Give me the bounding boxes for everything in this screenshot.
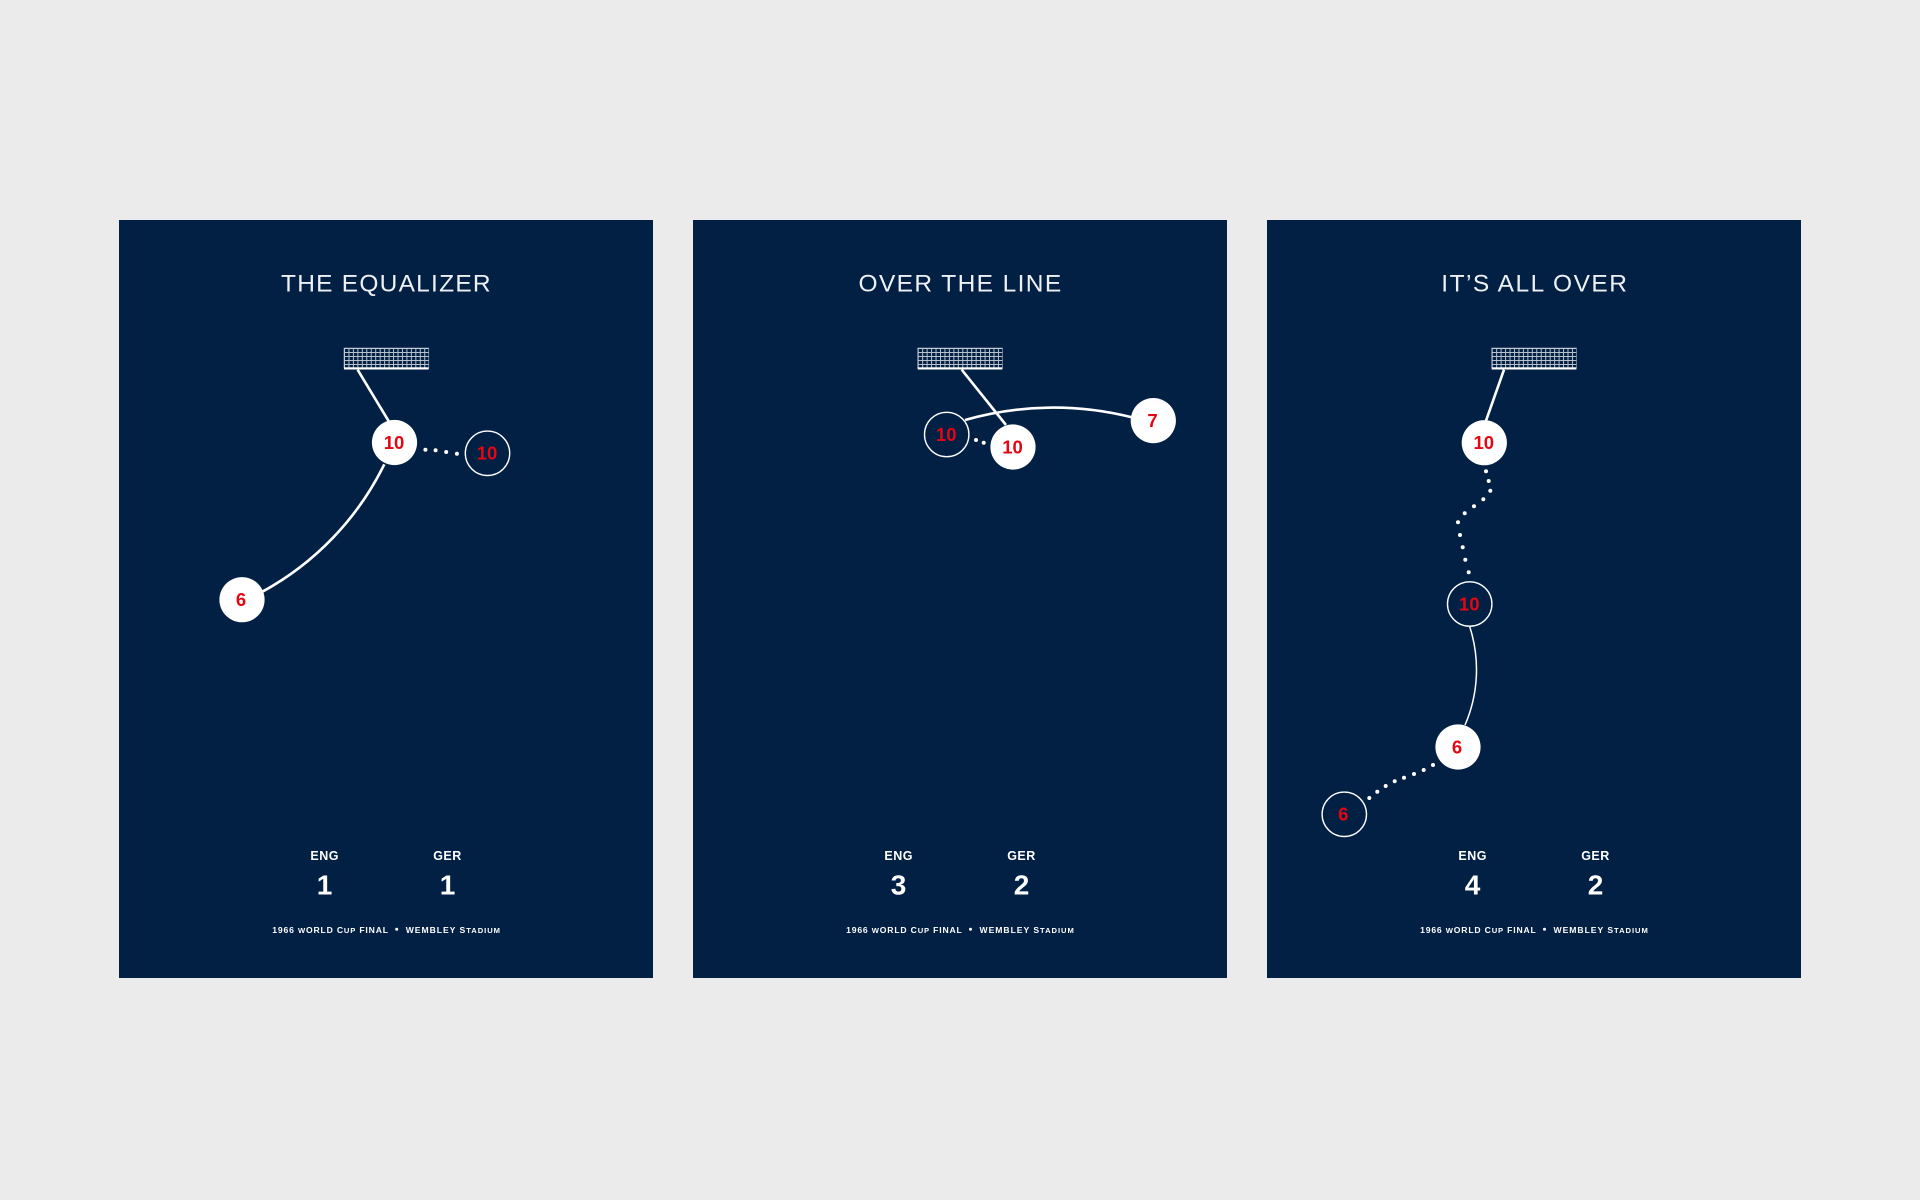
score: England — [1458, 849, 1487, 900]
dotted player run of player 6 — [1367, 763, 1435, 800]
player 10 marker: 10 — [1474, 432, 1494, 453]
score: England: ENG — [1458, 849, 1487, 863]
player 10 marker: 10 — [384, 432, 404, 453]
footer caption — [1420, 925, 1648, 935]
score: Germany: GER — [1581, 849, 1610, 863]
icon: goal net — [1492, 348, 1576, 370]
player 10 marker — [1462, 420, 1507, 465]
footer caption: WEMBLEY STADIUM — [980, 925, 1074, 935]
player 6 marker: 6 — [1452, 736, 1462, 757]
player 10 start marker — [465, 431, 510, 475]
score: England: 4 — [1465, 869, 1481, 900]
player 7 marker: 7 — [1147, 410, 1158, 431]
score: Germany — [1581, 849, 1610, 900]
score: Germany: GER — [1007, 849, 1036, 863]
player 6 start marker — [1322, 792, 1367, 836]
player 6 marker — [1435, 724, 1481, 770]
player 10 marker: 10 — [1002, 436, 1023, 457]
player 7 marker — [1131, 398, 1176, 443]
score: Germany: GER — [433, 849, 462, 863]
shot line to goal — [962, 370, 1006, 425]
player 10 marker — [990, 424, 1036, 470]
footer caption: 1966 WORLD CUP FINAL — [846, 925, 962, 935]
score: England: 1 — [317, 869, 332, 900]
player 10 start marker: 10 — [1459, 593, 1479, 614]
footer caption: 1966 WORLD CUP FINAL — [272, 925, 388, 935]
shot line to goal — [358, 370, 389, 422]
score: England: 3 — [891, 869, 906, 900]
footer caption: 1966 WORLD CUP FINAL — [1420, 925, 1536, 935]
dotted player run — [974, 438, 986, 445]
score: Germany: 2 — [1588, 869, 1603, 900]
pass arc from player 7 — [965, 408, 1132, 420]
score: England: ENG — [310, 849, 339, 863]
footer caption: WEMBLEY STADIUM — [406, 925, 500, 935]
dotted player run — [423, 448, 459, 456]
player 10 start marker — [1448, 582, 1492, 626]
player 10 start marker: 10 — [936, 424, 956, 445]
score: Germany: 1 — [440, 869, 455, 900]
dotted player run to shot — [1456, 469, 1492, 574]
score: Germany — [433, 849, 462, 900]
player 6 marker: 6 — [236, 589, 246, 610]
footer caption — [846, 925, 1074, 935]
footer caption — [272, 925, 500, 935]
panel: over the line — [693, 220, 1227, 978]
player 10 start marker — [924, 412, 969, 457]
panel: the equalizer — [119, 220, 653, 978]
icon: goal net — [918, 348, 1002, 370]
player 6 start marker: 6 — [1338, 804, 1348, 825]
pass arc from player 6 — [1465, 627, 1476, 725]
score: England — [310, 849, 339, 900]
panel: it's all over — [1267, 220, 1801, 978]
player 10 marker — [372, 420, 417, 465]
player 6 marker — [219, 577, 265, 622]
title: the equalizer: THE EQUALIZER — [281, 270, 491, 297]
score: England: ENG — [884, 849, 913, 863]
title: it's all over: IT’S ALL OVER — [1441, 270, 1627, 297]
player 10 start marker: 10 — [477, 443, 497, 464]
pass arc from player 6 to player 10 — [262, 464, 384, 592]
score: Germany: 2 — [1014, 869, 1029, 900]
footer caption: WEMBLEY STADIUM — [1554, 925, 1648, 935]
shot line to goal — [1486, 370, 1504, 421]
icon: goal net — [344, 348, 429, 370]
score: England — [884, 849, 913, 900]
score: Germany — [1007, 849, 1036, 900]
title: over the line: OVER THE LINE — [858, 270, 1061, 297]
